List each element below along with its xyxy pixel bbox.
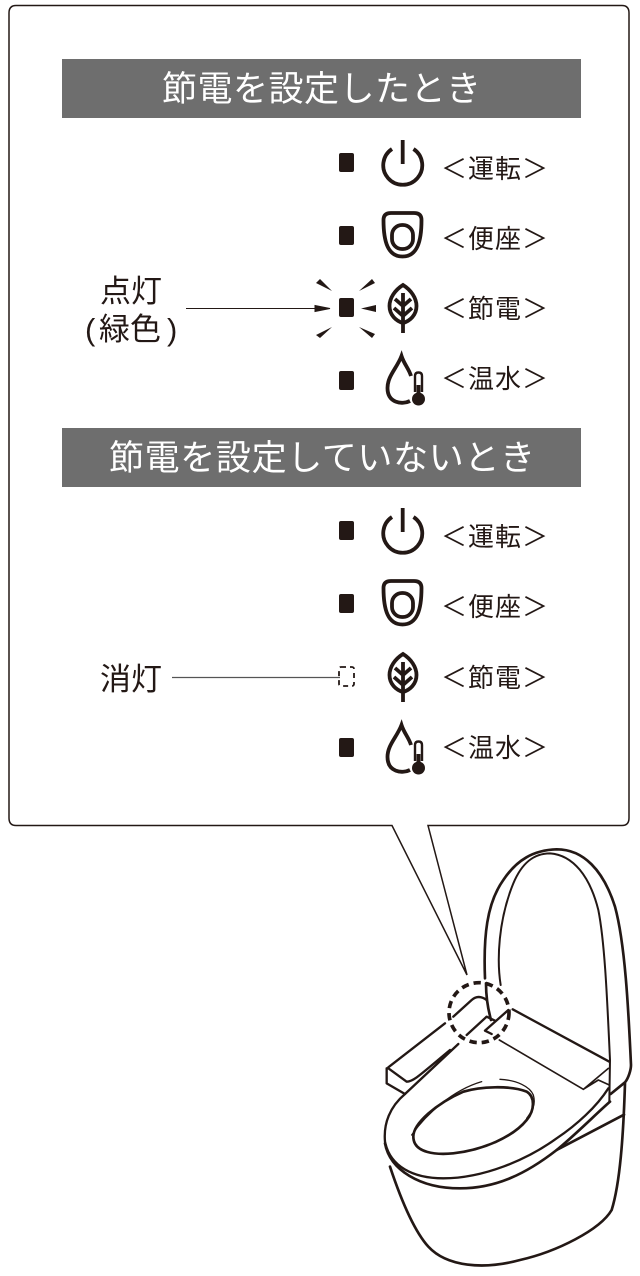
arrow: lit label to indicator [186,306,330,312]
indicator: seat row, not set [339,581,548,624]
seat [385,1088,608,1178]
lid outer and inner [485,849,631,1094]
heading: when power saving is not set [62,428,581,487]
bowl [390,1083,625,1265]
label: lit green: 緑色 [99,312,161,347]
indicator: power saving row, lit [316,279,548,338]
seat hinge lines [513,1009,609,1062]
label: lit green: ( [85,312,96,347]
seat opening [413,1087,533,1154]
indicator: operation row, set [339,140,548,185]
icon: leaf [390,654,416,702]
indicator: operation row, not set: ＜運転＞ [441,522,548,552]
indicator: operation row, not set [339,508,548,553]
icon: drop with thermometer [388,356,425,406]
label: lit green [85,274,177,347]
heading: when power saving is set [62,59,581,118]
indicator: seat row, set [339,213,548,256]
label: off: 消灯 [100,662,162,697]
indicator: power saving row, off: ＜節電＞ [441,663,548,693]
icon: blink rays [316,279,376,338]
icon: leaf [390,285,416,333]
line: off label to indicator [172,676,340,678]
indicator: power saving row, lit: ＜節電＞ [441,294,548,324]
heading: when power saving is not set: 節電を設定していないとき [109,439,535,478]
indicator: power saving row, off [339,654,548,702]
indicator: seat row, not set: ＜便座＞ [441,592,548,622]
indicator: hot water row, not set [339,725,548,774]
speech bubble panel [9,6,629,975]
indicator: hot water row, set: ＜温水＞ [441,364,548,394]
illustration: toilet [385,849,631,1265]
indicator: operation row, set: ＜運転＞ [441,154,548,184]
indicator: hot water row, set [339,356,548,406]
dashed highlight circle [449,983,509,1043]
indicator: hot water row, not set: ＜温水＞ [441,733,548,763]
label: lit green: 点灯 [100,274,162,309]
control arm [387,997,508,1094]
heading: when power saving is set: 節電を設定したとき [162,70,481,109]
label: lit green: ) [167,312,177,347]
icon: drop with thermometer [388,725,425,774]
indicator: seat row, set: ＜便座＞ [441,224,548,254]
